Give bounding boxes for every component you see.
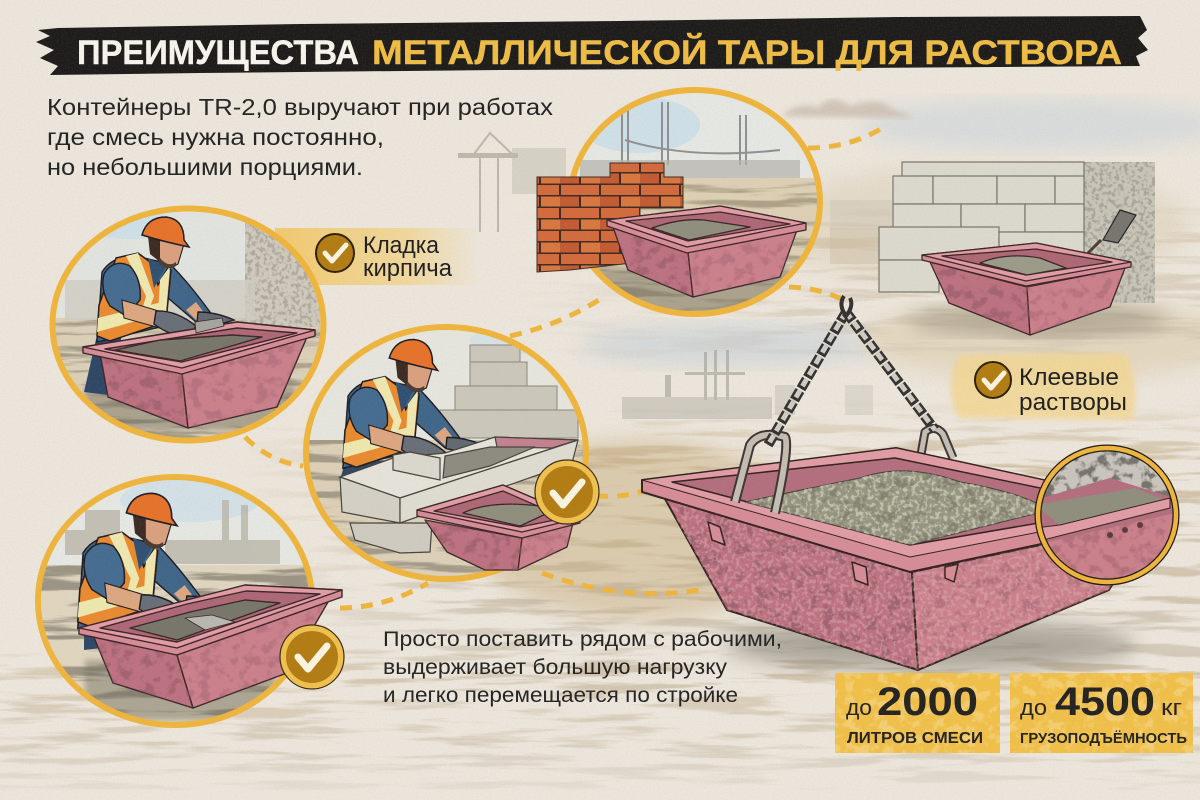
trowel: [1088, 210, 1136, 253]
cloud: [782, 99, 915, 118]
panel: brick laying top circle: [537, 85, 830, 320]
bottom text: выдерживает большую нагрузку: [383, 656, 728, 679]
icon: check badge: [535, 460, 599, 524]
distant site: crane and towers in the middle: [622, 350, 873, 419]
ring: [52, 208, 324, 440]
lugs: [708, 522, 958, 585]
bricks: [537, 163, 683, 272]
intro text: где смесь нужна постоянно,: [47, 124, 384, 150]
tag text: [1019, 364, 1127, 416]
ring: [38, 477, 312, 725]
stat: 4500 kg: кг: [1161, 695, 1182, 720]
icon: check: [975, 362, 1011, 398]
ring: [306, 327, 586, 579]
circle scene: [56, 212, 320, 438]
faces: [660, 490, 1150, 670]
intro text: Контейнеры TR-2,0 выручают при работах: [47, 94, 554, 120]
tag: brick laying: [275, 228, 480, 285]
icon: check: [316, 234, 354, 272]
panel: worker circle 3: [35, 470, 344, 740]
bottom text: и легко перемещается по стройке: [383, 684, 738, 707]
stat: 4500 kg: ГРУЗОПОДЪЁМНОСТЬ: [1020, 730, 1187, 747]
stat: 4500 kg: [1010, 673, 1193, 753]
tag text: кирпича: [363, 255, 453, 282]
stat: 2000 litres: 2000: [877, 680, 978, 724]
tag text: Кладка: [363, 232, 440, 259]
block courses: [340, 437, 578, 553]
tag text: Клеевые: [1019, 364, 1119, 391]
title text yellow: МЕТАЛЛИЧЕСКОЙ ТАРЫ ДЛЯ РАСТВОРА: [372, 33, 1122, 72]
circle scene: [41, 480, 308, 722]
big container with chain: [642, 296, 1168, 671]
tag band: [275, 228, 480, 285]
panel: worker circle 1: [50, 190, 330, 450]
front left lifting loop: [735, 435, 786, 513]
intro text: но небольшими порциями.: [47, 154, 363, 180]
connector dashes: [245, 127, 884, 608]
chain: [768, 296, 935, 445]
rim: [642, 448, 1168, 572]
title text white: ПРЕИМУЩЕСТВА: [77, 34, 359, 72]
bottom text: [383, 628, 782, 707]
container: [417, 485, 580, 570]
intro text: [47, 94, 554, 180]
stat: 4500 kg: 4500: [1055, 680, 1155, 724]
container right top: [922, 243, 1131, 335]
panel: worker circle 2: [305, 320, 599, 590]
container: [83, 318, 315, 428]
stat: 2000 litres: [835, 673, 1000, 753]
shadow: [725, 619, 1135, 671]
ring: [570, 90, 820, 314]
icon: check badge: [280, 625, 344, 689]
circle photo: [580, 98, 817, 311]
back right lifting loop: [920, 428, 953, 460]
stat: 2000 litres: ЛИТРОВ СМЕСИ: [847, 730, 983, 747]
stat: 2000 litres: до: [846, 695, 872, 720]
magnifier detail: [1035, 445, 1180, 590]
block wall scene top right: [879, 162, 1170, 336]
inner walls: [672, 458, 1132, 545]
container: [607, 206, 806, 297]
stat: 4500 kg: до: [1020, 695, 1047, 720]
tag text: растворы: [1019, 389, 1127, 416]
mortar: [745, 471, 1050, 545]
brush stroke: [36, 16, 1148, 75]
title band: [36, 16, 1148, 75]
bottom text: Просто поставить рядом с рабочими,: [383, 628, 782, 651]
distant site: crane and buildings at top centre: [458, 133, 892, 264]
tag blob: [950, 353, 1136, 420]
tag: adhesive mortars: [950, 353, 1136, 420]
circle scene: [309, 333, 583, 576]
tag text: [363, 232, 453, 282]
container: [79, 585, 342, 708]
